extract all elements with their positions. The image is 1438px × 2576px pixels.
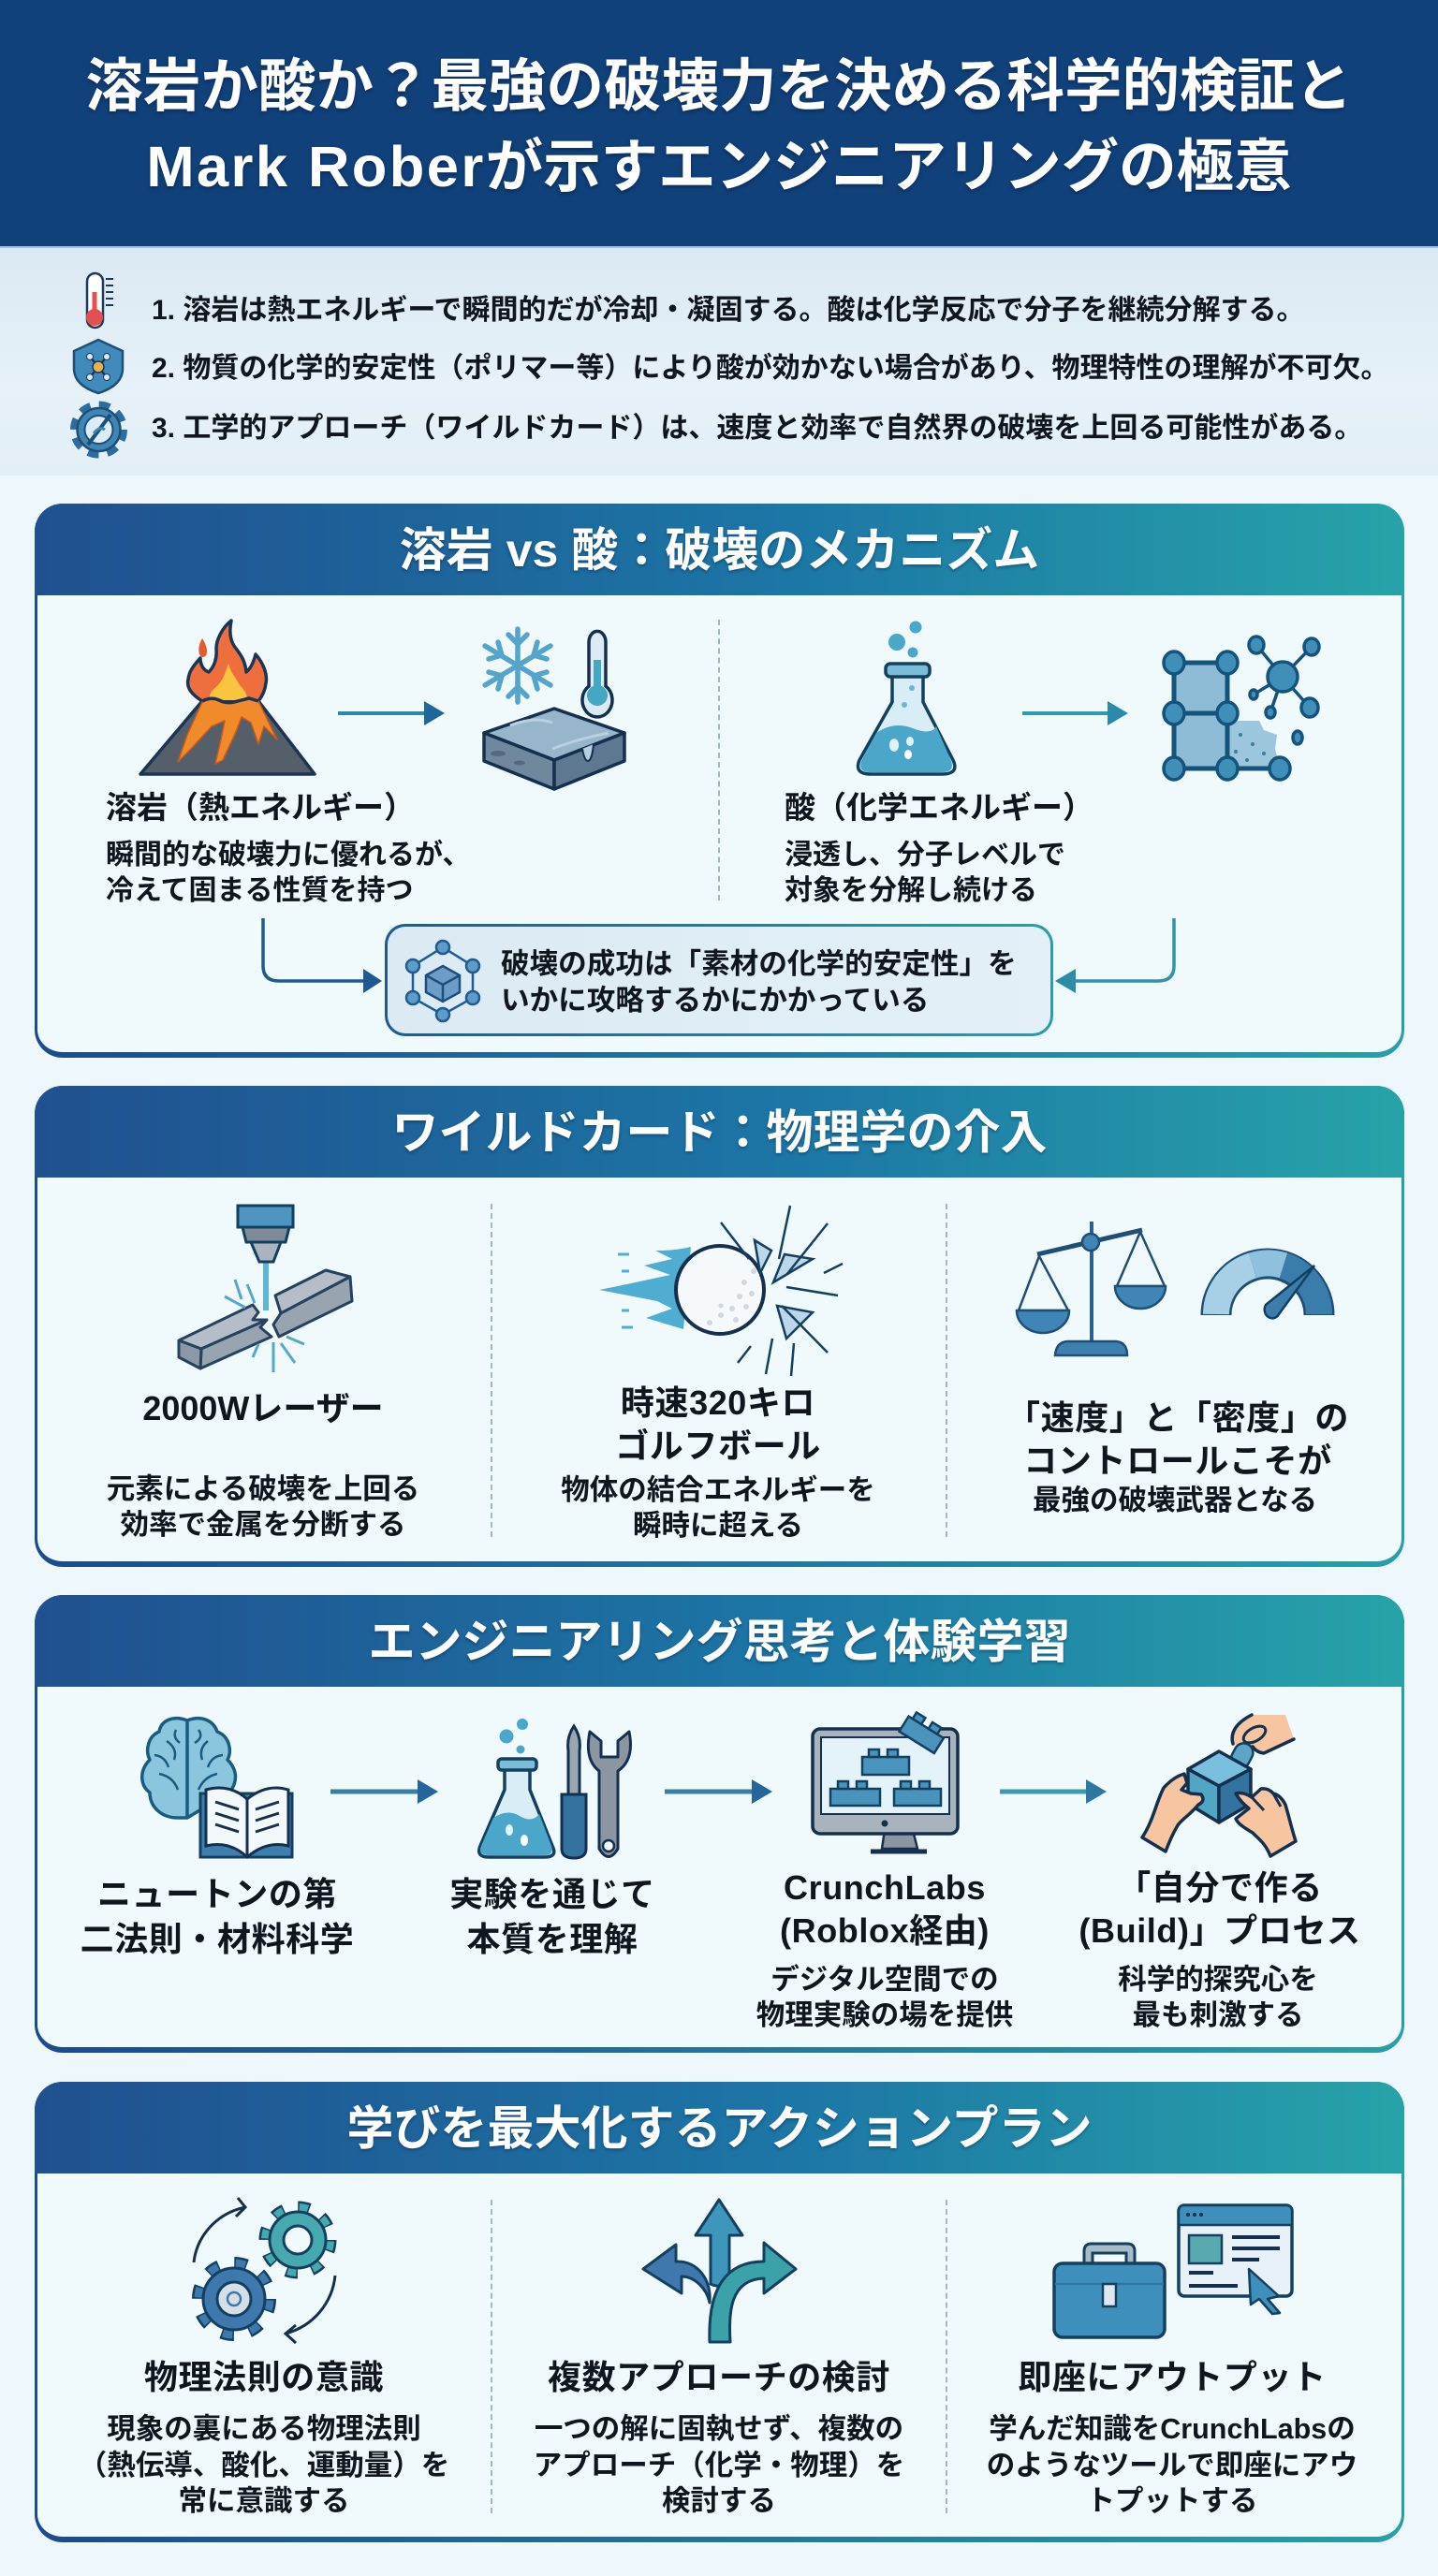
experiment heading: 本質を理解: [466, 1920, 638, 1958]
callout: [385, 924, 1053, 1036]
lava description: 瞬間的な破壊力に優れるが、: [106, 840, 470, 871]
experiment heading: 実験を通じて: [449, 1875, 655, 1913]
lava heading: 溶岩（熱エネルギー）: [106, 790, 415, 825]
icon: cube network: [404, 940, 481, 1022]
laser description: 元素による破壊を上回る: [107, 1473, 419, 1505]
icon: hands building a cube: [1140, 1713, 1298, 1858]
icon: browser with cursor: [1175, 2201, 1297, 2317]
laser heading: 2000Wレーザー: [142, 1389, 384, 1427]
panel heading: [35, 504, 1404, 595]
physics description: 常に意識する: [178, 2485, 350, 2517]
icon: flask with bubbles: [856, 622, 957, 776]
crunchlabs heading: (Roblox経由): [780, 1911, 990, 1950]
callout text: いかに攻略するかにかかっている: [501, 985, 929, 1017]
build heading: (Build)」プロセス: [1078, 1911, 1361, 1950]
icon: thermometer: [86, 271, 113, 329]
acid description: 浸透し、分子レベルで: [785, 840, 1065, 871]
summary strip: [0, 248, 1438, 476]
acid description: [785, 840, 1065, 906]
newton heading: [81, 1875, 354, 1958]
speed and density heading: [1006, 1398, 1349, 1480]
physics description: （熱伝導、酸化、運動量）を: [79, 2449, 449, 2481]
icon: ice block: [482, 707, 626, 791]
title text: [85, 54, 1353, 199]
speed and density description: 最強の破壊武器となる: [1033, 1485, 1317, 1516]
title text: Mark Roberが示すエンジニアリングの極意: [146, 135, 1292, 199]
icon: brain and book: [140, 1717, 294, 1859]
icon: snowflake: [482, 626, 553, 705]
speed and density heading: コントロールこそが: [1023, 1442, 1332, 1480]
icon: laser cutting metal bar: [178, 1204, 354, 1372]
newton heading: ニュートンの第: [97, 1875, 337, 1913]
arrow: [1022, 701, 1128, 725]
title banner: [0, 0, 1438, 248]
title text: 溶岩か酸か？最強の破壊力を決める科学的検証と: [85, 54, 1353, 119]
immediate output description: 学んだ知識をCrunchLabsの: [989, 2413, 1356, 2445]
panel heading: エンジニアリング思考と体験学習: [369, 1616, 1071, 1668]
panel: action plan: [35, 2082, 1404, 2542]
connector arrow: acid to callout: [1055, 918, 1176, 993]
icon: volcano: [139, 619, 316, 776]
arrow: [665, 1779, 772, 1804]
acid description: 対象を分解し続ける: [785, 874, 1037, 906]
physics description: [79, 2411, 449, 2520]
lava description: [106, 839, 470, 906]
crunchlabs description: 物理実験の場を提供: [756, 1999, 1013, 2031]
panel heading: [35, 1086, 1404, 1178]
immediate output description: [987, 2411, 1357, 2520]
panel: wildcard physics: [35, 1086, 1404, 1567]
callout text: [501, 948, 1017, 1017]
golf ball description: 瞬時に超える: [633, 1510, 803, 1542]
icon: shield: [73, 339, 124, 395]
crunchlabs heading: [780, 1868, 990, 1950]
newton heading: 二法則・材料科学: [81, 1920, 354, 1958]
panel heading: 学びを最大化するアクションプラン: [346, 2102, 1092, 2155]
crunchlabs description: [756, 1964, 1013, 2031]
icon: toolbox: [1050, 2239, 1168, 2342]
panel heading: 溶岩 vs 酸：破壊のメカニズム: [400, 524, 1039, 577]
icon: diverging arrows: [638, 2196, 800, 2346]
connector arrow: lava to callout: [261, 918, 382, 993]
acid heading: 酸（化学エネルギー）: [785, 790, 1093, 825]
immediate output description: トプットする: [1086, 2485, 1258, 2517]
build description: 最も刺激する: [1133, 1999, 1303, 2031]
golf ball heading: 時速320キロ: [621, 1383, 815, 1422]
panel heading: [35, 1595, 1404, 1687]
golf ball description: 物体の結合エネルギーを: [561, 1474, 875, 1506]
physics description: 現象の裏にある物理法則: [107, 2413, 421, 2445]
icon: engineering gear: [70, 401, 127, 459]
laser description: [107, 1473, 419, 1541]
laser description: 効率で金属を分断する: [120, 1509, 406, 1541]
golf ball heading: ゴルフボール: [615, 1427, 821, 1465]
build description: 科学的探究心を: [1118, 1964, 1318, 1996]
multiple approaches description: 一つの解に固執せず、複数の: [535, 2413, 903, 2445]
panel: engineering thinking and hands-on learning: [35, 1595, 1404, 2053]
build heading: [1078, 1866, 1361, 1953]
panel heading: [35, 2082, 1404, 2174]
crunchlabs heading: CrunchLabs: [784, 1868, 986, 1907]
multiple approaches description: [534, 2411, 904, 2520]
golf ball heading: [615, 1383, 821, 1465]
arrow: [1000, 1779, 1107, 1804]
key point 3: 3. 工学的アプローチ（ワイルドカード）は、速度と効率で自然界の破壊を上回る可能性がある。: [152, 413, 1362, 444]
icon: monitor with blocks: [811, 1711, 960, 1853]
multiple approaches heading: 複数アプローチの検討: [548, 2358, 890, 2396]
icon: molecular lattice: [1162, 635, 1321, 782]
key point 1: 1. 溶岩は熱エネルギーで瞬間的だが冷却・凝固する。酸は化学反応で分子を継続分解する。: [152, 295, 1305, 326]
panel: destruction mechanism: [35, 504, 1404, 1058]
icon: balance scale: [1015, 1222, 1167, 1357]
immediate output description: のようなツールで即座にアウ: [987, 2449, 1357, 2481]
multiple approaches description: 検討する: [662, 2485, 776, 2517]
icon: flask and tools: [477, 1719, 632, 1859]
speed and density heading: 「速度」と「密度」の: [1006, 1398, 1349, 1437]
icon: golf ball breaking through: [599, 1206, 843, 1376]
icon: rotating gears: [187, 2196, 343, 2346]
multiple approaches description: アプローチ（化学・物理）を: [534, 2449, 904, 2481]
build description: [1118, 1962, 1318, 2033]
arrow: [330, 1779, 438, 1804]
physics heading: 物理法則の意識: [144, 2358, 384, 2396]
lava description: 冷えて固まる性質を持つ: [106, 874, 414, 906]
golf ball description: [561, 1474, 875, 1542]
icon: thermometer: [580, 629, 614, 719]
immediate output heading: 即座にアウトプット: [1018, 2358, 1327, 2396]
crunchlabs description: デジタル空間での: [770, 1964, 999, 1996]
panel heading: ワイルドカード：物理学の介入: [391, 1106, 1047, 1159]
arrow: [338, 701, 445, 725]
key point 2: 2. 物質の化学的安定性（ポリマー等）により酸が効かない場合があり、物理特性の理解が不可欠。: [152, 353, 1389, 384]
callout text: 破壊の成功は「素材の化学的安定性」を: [501, 948, 1017, 980]
build heading: 「自分で作る: [1117, 1868, 1323, 1907]
icon: speed gauge: [1200, 1249, 1335, 1320]
experiment heading: [449, 1875, 655, 1958]
